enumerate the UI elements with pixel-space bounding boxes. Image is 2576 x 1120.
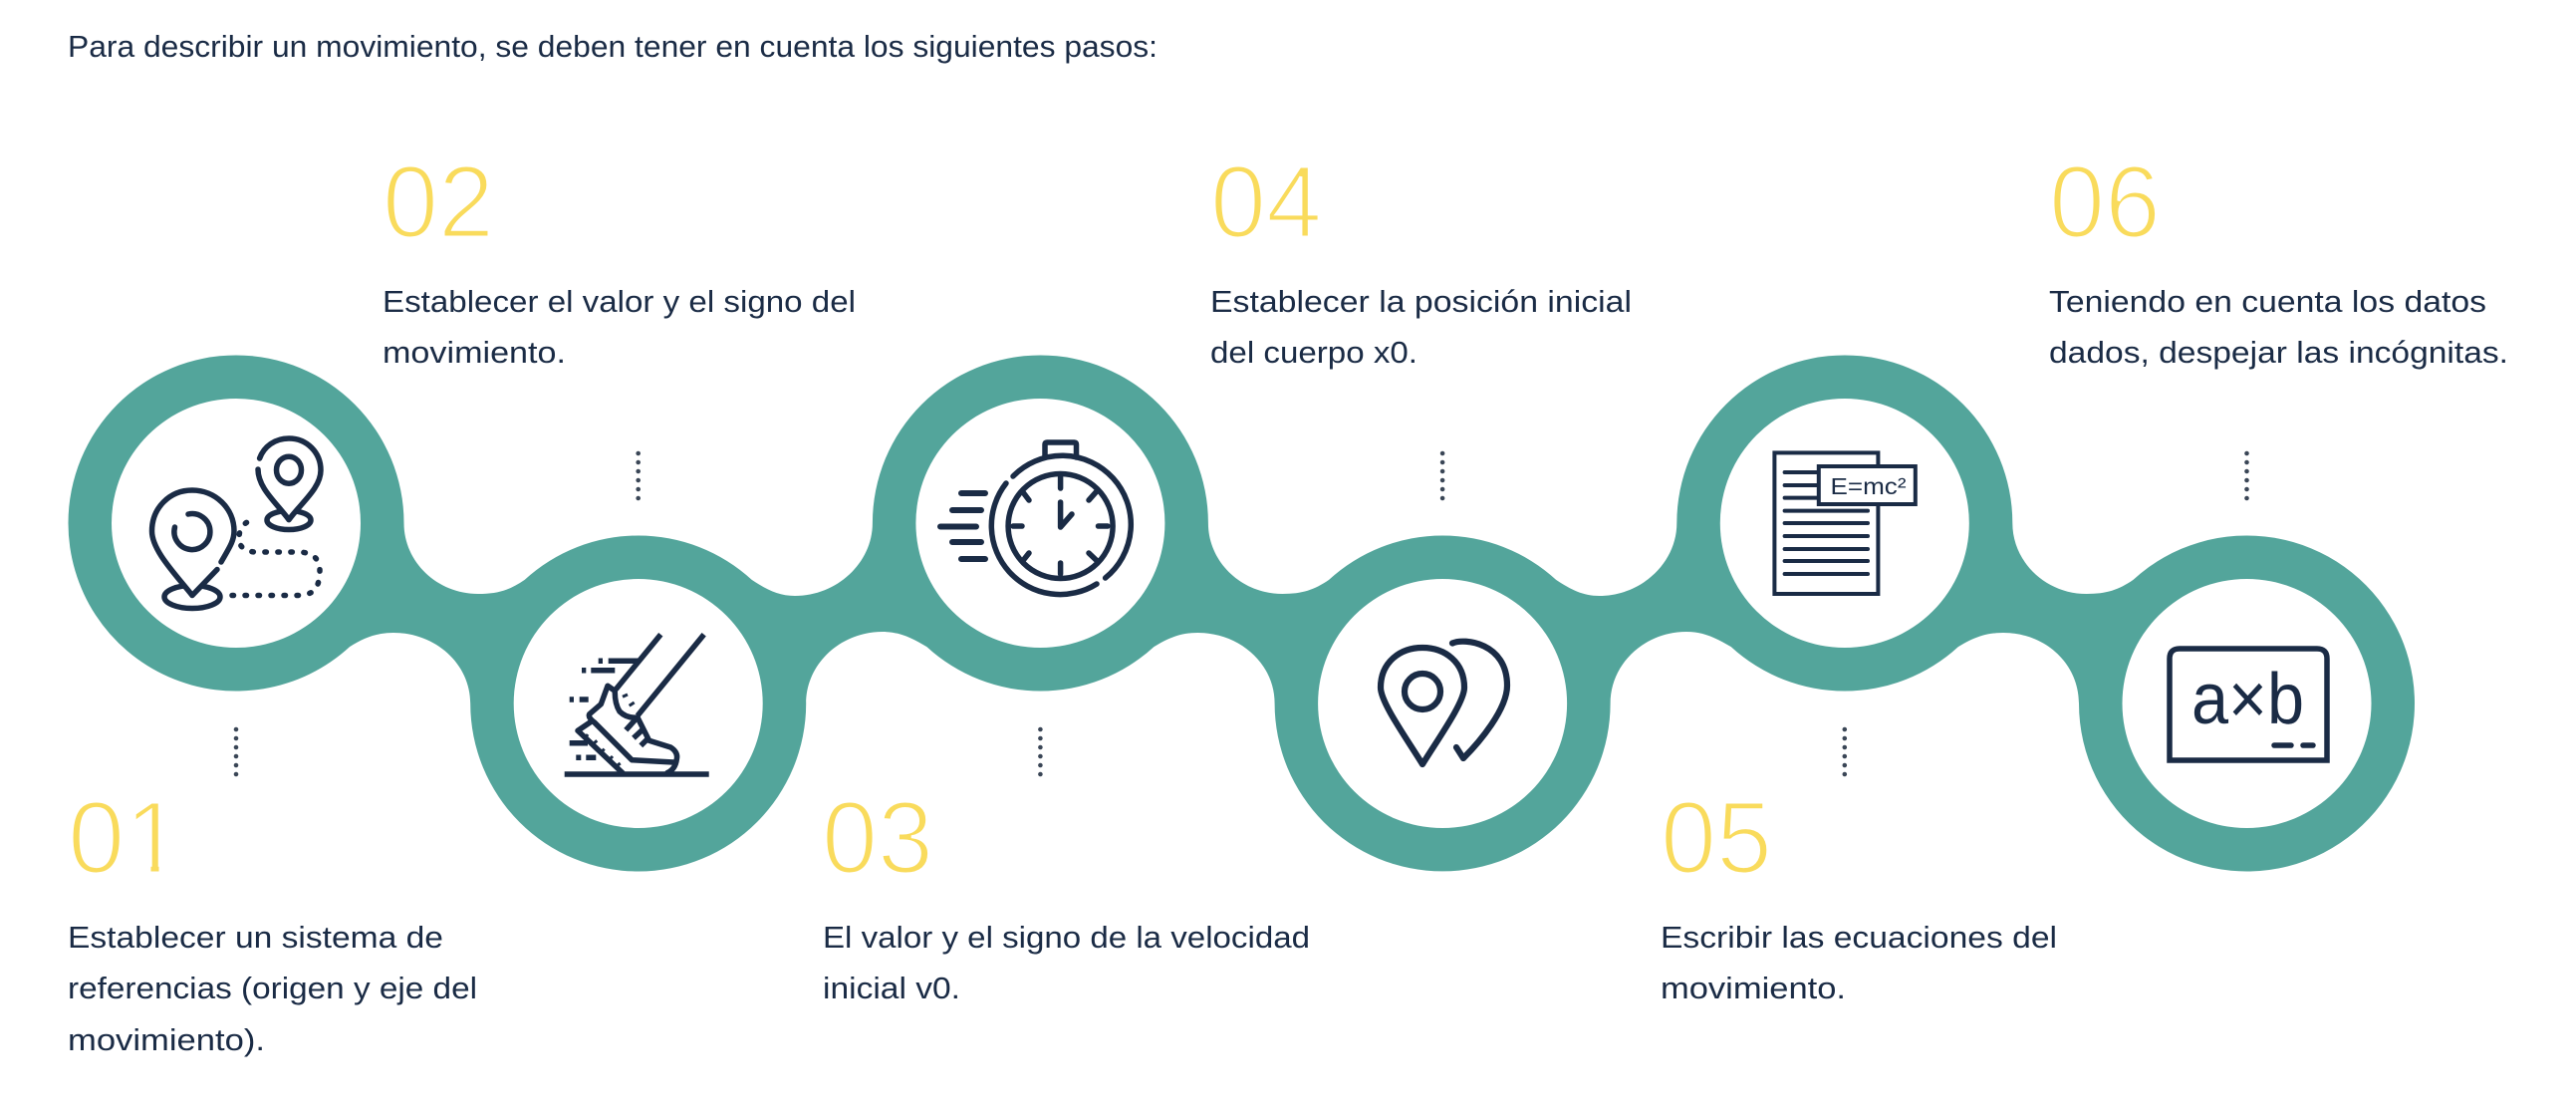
description 05: Escribir las ecuaciones del: [1661, 921, 2057, 955]
dotted connector: step 1: [234, 729, 238, 775]
icon: two map pins joined by a dotted route: [151, 438, 321, 608]
icon: document with E=mc² formula: [1774, 452, 1916, 594]
step 2: [383, 144, 856, 370]
number 05: 05: [1661, 780, 1772, 895]
description 01: referencias (origen y eje del: [68, 972, 477, 1005]
dotted connector: step 6: [2244, 453, 2249, 499]
description 01: Establecer un sistema de: [68, 921, 443, 955]
number 02: 02: [383, 144, 494, 259]
description 02: movimiento.: [383, 336, 566, 370]
icon: stopwatch with speed lines: [940, 442, 1131, 595]
description 01: movimiento).: [68, 1023, 265, 1057]
description 02: Establecer el valor y el signo del: [383, 285, 856, 319]
wavy chain of six linked rings: [68, 355, 2415, 871]
step 6: [2049, 144, 2508, 370]
description 06: dados, despejar las incógnitas.: [2049, 336, 2508, 370]
description 04: [1210, 285, 1632, 370]
icon: location pin with check mark: [1381, 642, 1507, 764]
description 06: Teniendo en cuenta los datos: [2049, 285, 2486, 319]
icon: document with E=mc² formula: E=mc²: [1831, 473, 1907, 499]
description 01: [68, 921, 477, 1057]
description 05: movimiento.: [1661, 972, 1846, 1005]
description 04: del cuerpo x0.: [1210, 336, 1417, 370]
intro heading: Para describir un movimiento, se deben tener en cuenta los siguientes pasos:: [68, 30, 1158, 64]
number 03: 03: [822, 780, 933, 895]
icon: board with a×b: a×b: [2191, 660, 2304, 739]
dotted connector: step 5: [1843, 729, 1847, 775]
description 03: [823, 921, 1310, 1005]
number 04: 04: [1210, 144, 1322, 259]
icon: board with a×b: [2170, 649, 2327, 760]
dotted connector: step 4: [1440, 453, 1444, 499]
number 06: 06: [2049, 144, 2161, 259]
step 5: [1661, 780, 2057, 1005]
dotted connector: step 3: [1038, 729, 1043, 775]
description 05: [1661, 921, 2057, 1005]
description 06: [2049, 285, 2508, 370]
description 02: [383, 285, 856, 370]
description 03: inicial v0.: [823, 972, 960, 1005]
step 3: [822, 780, 1310, 1005]
description 04: Establecer la posición inicial: [1210, 285, 1632, 319]
number 01: 01: [68, 780, 182, 895]
dotted connector: step 2: [636, 453, 641, 499]
icon: running shoe: [565, 635, 709, 774]
step 4: [1210, 144, 1632, 370]
step 1: [68, 780, 477, 1057]
description 03: El valor y el signo de la velocidad: [823, 921, 1310, 955]
